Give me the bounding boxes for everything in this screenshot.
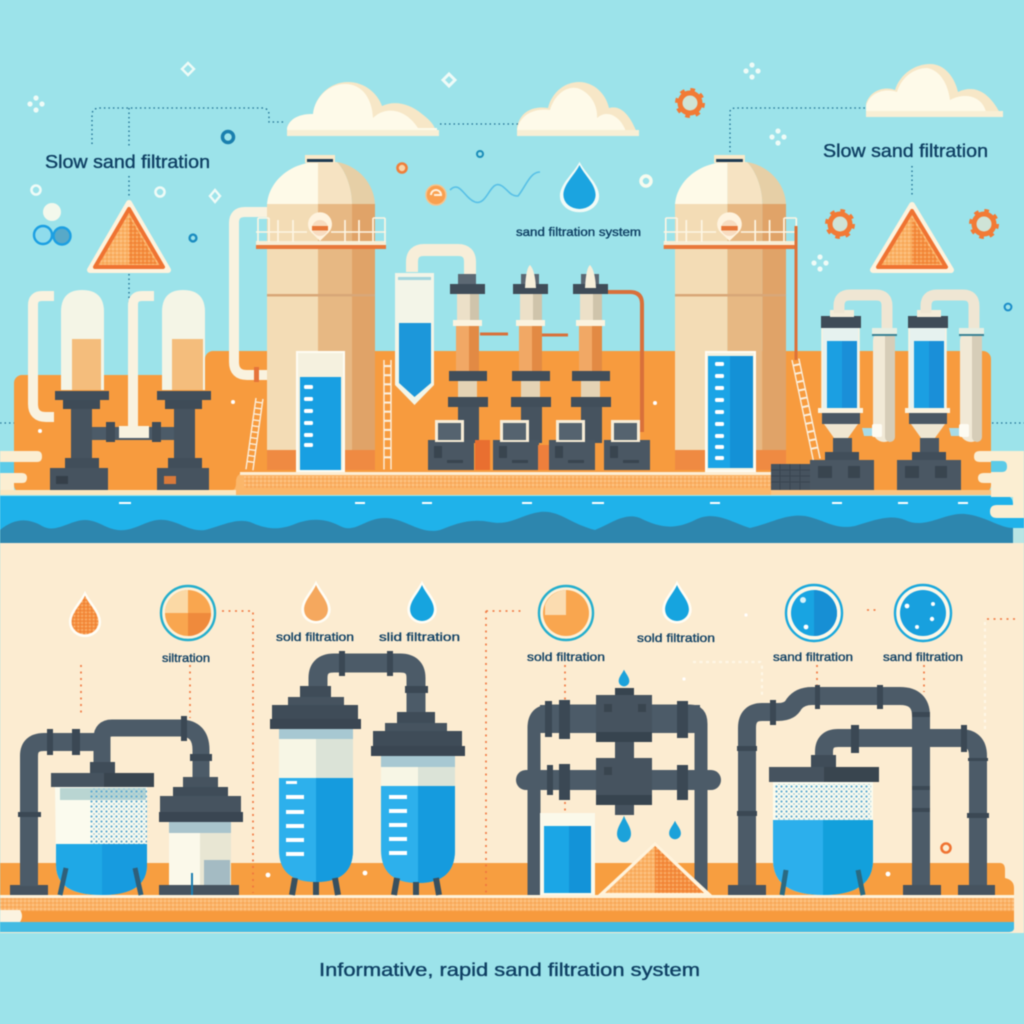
gauge: right silo level [706, 352, 755, 471]
filter unit: left capsules [33, 290, 211, 490]
control boxes [428, 420, 650, 470]
river [0, 496, 1024, 543]
icon: bubbles [34, 203, 70, 244]
icon: blue drop 1 [407, 580, 437, 624]
dotted connector lines [0, 108, 1024, 423]
tank: right silo [664, 155, 797, 470]
cloud: right [866, 64, 1003, 117]
ladders [246, 360, 391, 470]
icon: sand circle 2 [539, 586, 593, 640]
cloud: left [287, 82, 439, 136]
icon: water drop [560, 162, 599, 212]
pipe and ladder: right silo [792, 226, 820, 460]
filter unit C: twin valves, glass and sand pile [516, 670, 721, 895]
label: sold filtration 3: sold filtration [637, 631, 715, 645]
label: siltration: siltration [162, 651, 210, 665]
icon: water circle 1 [786, 585, 842, 641]
icon: gear top [677, 90, 703, 116]
icon: sand warning triangle left [90, 203, 168, 270]
icon: gears right [827, 211, 997, 237]
icon: sand drop [69, 591, 101, 637]
filter unit A: wide vessel with small filter [10, 716, 243, 895]
water patch right edge [1013, 528, 1024, 543]
pipe: white feed to left silo [234, 212, 268, 382]
sand and water bands [0, 895, 1014, 932]
dotted callout lines [81, 610, 1018, 893]
label: sand filtration 2: sand filtration [883, 650, 963, 664]
icon: sand warning triangle right [873, 205, 951, 270]
small lower ornaments [38, 400, 950, 877]
filter columns [448, 265, 611, 443]
panel: lower cream background [0, 543, 1024, 933]
title: left: Slow sand filtration [45, 152, 210, 172]
small sky ornaments [27, 62, 1011, 310]
filter unit D: vessel with long pipes [728, 685, 995, 895]
cloud: middle [517, 82, 639, 136]
label: sold filtration 2: sold filtration [527, 650, 605, 664]
icon: orange spinner and wave [426, 172, 540, 205]
title: right: Slow sand filtration [823, 141, 988, 161]
label: sold filtration 1: sold filtration [276, 630, 354, 644]
filter unit B: pair of tall cylinders [270, 651, 465, 895]
filter unit: right glass tubes [771, 295, 984, 490]
icon: water circle 2 [895, 585, 951, 641]
foam blobs [0, 451, 1024, 518]
pipe: orange link [480, 292, 642, 432]
label: sand filtration 1: sand filtration [773, 650, 853, 664]
tank: left silo [256, 155, 386, 470]
sand base strip [0, 472, 1011, 495]
icon: blue drop 2 [662, 580, 692, 624]
gauge: left silo level [297, 352, 344, 471]
panel: orange ground behind plant [14, 351, 991, 493]
label: system: sand filtration system [516, 227, 641, 239]
tank: funnel column [395, 250, 470, 405]
sky background [0, 0, 1024, 543]
panel: lower orange ground [0, 863, 1014, 895]
icon: sand circle 1 [161, 586, 215, 640]
label: slid filtration: slid filtration [379, 630, 460, 644]
icon: orange drop [301, 580, 331, 624]
footer caption: Informative, rapid sand filtration system [319, 960, 700, 980]
